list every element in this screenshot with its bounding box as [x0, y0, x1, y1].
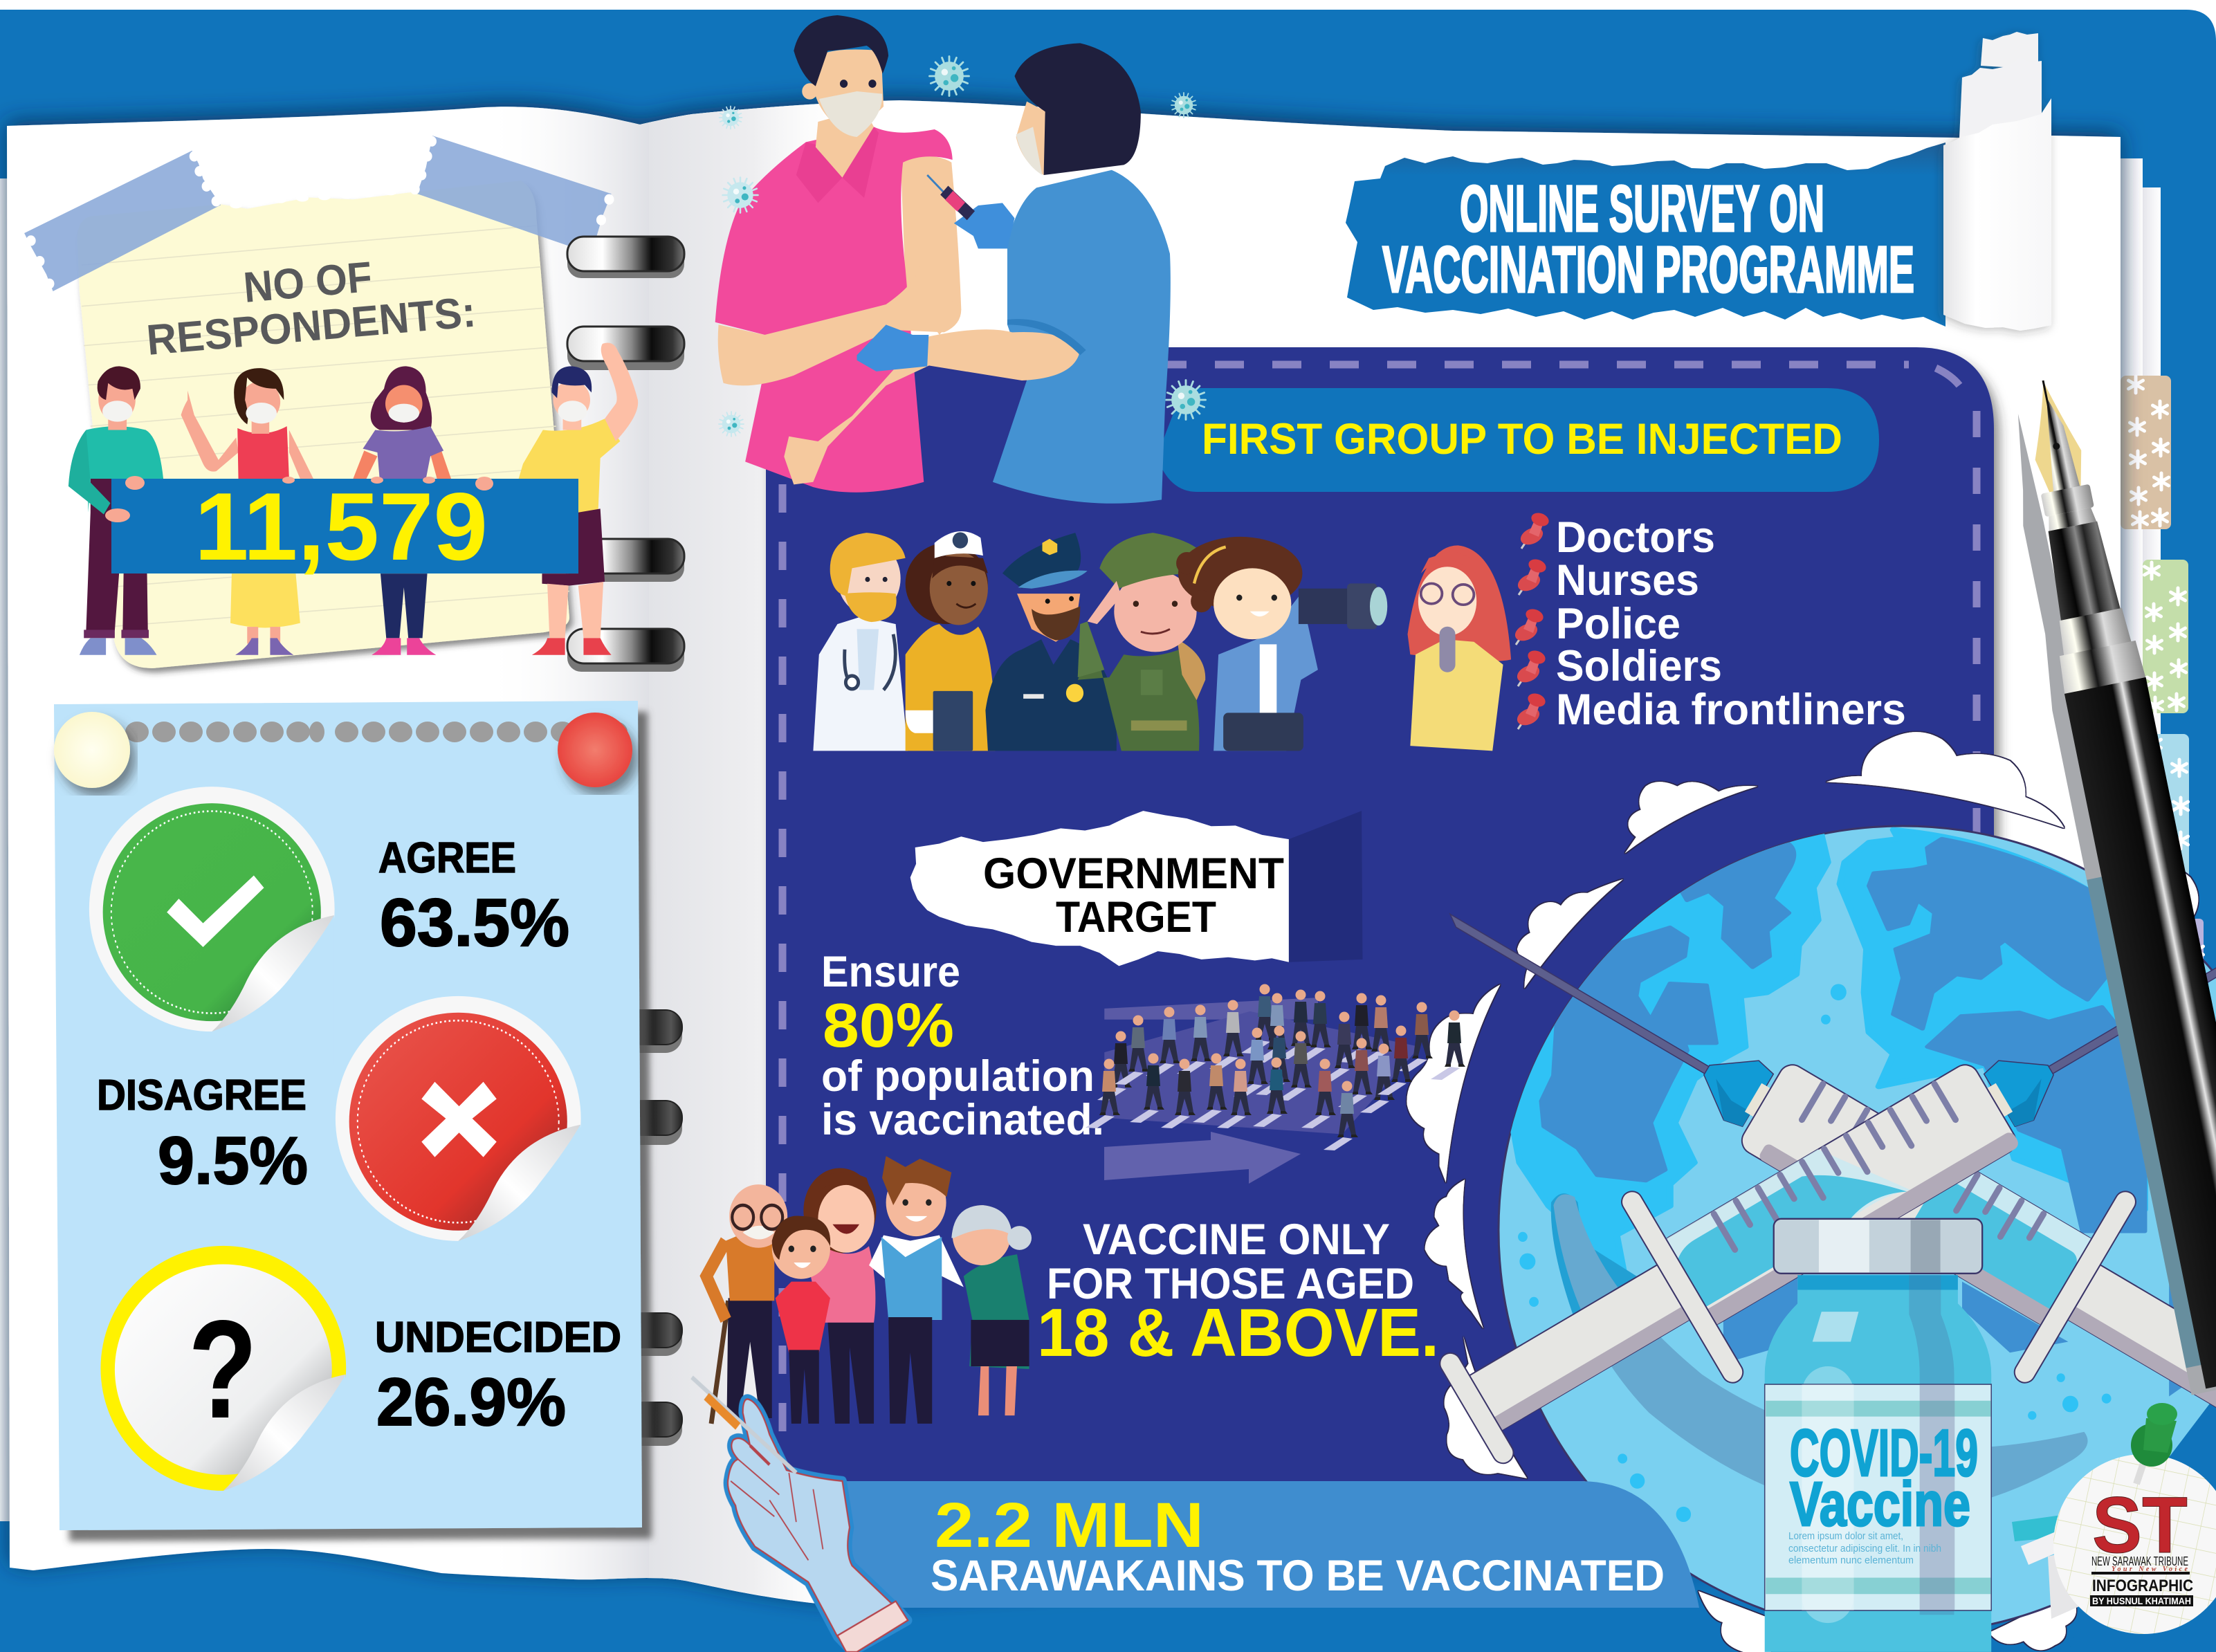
father — [869, 1156, 964, 1424]
survey results note — [54, 701, 642, 1530]
result: undecided — [375, 1314, 621, 1440]
person: red dress — [181, 368, 313, 655]
icon: green pin — [2131, 1403, 2177, 1484]
police — [985, 533, 1117, 751]
credit: BY HUSNUL KHATIMAH — [2092, 1595, 2191, 1606]
frontliners illustration — [813, 531, 1387, 751]
corner blue beyond globe — [2069, 1395, 2216, 1652]
virus particles — [719, 57, 1196, 437]
boy — [772, 1216, 830, 1424]
pushpins — [1512, 511, 1550, 729]
photographer — [1176, 537, 1387, 751]
globe land: blue south-east — [1927, 1007, 2145, 1231]
grandfather — [706, 1184, 787, 1424]
respondent people — [68, 343, 638, 655]
vaccine age text: 18 & ABOVE. — [1037, 1294, 1439, 1370]
notebook left under-page — [0, 178, 31, 1521]
target statistic text: of population — [821, 1052, 1095, 1101]
target statistic text: is vaccinated. — [821, 1096, 1104, 1144]
label text: GOVERNMENT — [983, 850, 1284, 898]
doctor — [813, 533, 908, 751]
vaccination scene — [715, 15, 1171, 504]
binding holes — [125, 722, 628, 742]
logo mark: ST — [2092, 1481, 2188, 1570]
mother — [803, 1168, 877, 1424]
result: undecided: UNDECIDED — [375, 1314, 621, 1361]
sticker: disagree — [336, 996, 581, 1275]
vaccine vial: consectetur adipiscing elit. In in nibh — [1788, 1543, 1941, 1554]
globe — [1499, 826, 2216, 1634]
note heading: NO OF — [241, 253, 374, 312]
pen shadow — [1993, 413, 2216, 1395]
frontline journalist — [1408, 545, 1511, 751]
spine shading — [509, 104, 819, 1604]
government target torn label: TARGET — [1056, 893, 1216, 942]
target statistic text: Ensure — [821, 948, 960, 996]
first group heading pill — [1157, 388, 1879, 492]
blue band with count — [105, 473, 578, 580]
vaccine age text — [1037, 1215, 1439, 1370]
title text line 1: ONLINE SURVEY ON — [1460, 172, 1824, 246]
syringe: upper-right needle — [1412, 823, 2216, 1507]
crowd walking — [1086, 984, 1465, 1184]
tab: beige — [2121, 376, 2171, 529]
question mark: ? — [188, 1291, 257, 1447]
paper curl — [1943, 32, 2051, 331]
tape: left — [24, 151, 221, 291]
list: first group: Doctors — [1556, 513, 1715, 562]
target statistic text: 80% — [823, 991, 954, 1061]
vaccine vial — [1765, 1219, 1991, 1652]
list: first group: Soldiers — [1556, 642, 1722, 690]
icon: cream pin — [54, 712, 130, 788]
globe land: bright east — [1840, 829, 2145, 1210]
result: agree — [378, 834, 569, 960]
vaccine vial: Lorem ipsum dolor sit amet, — [1788, 1530, 1903, 1542]
list: first group: Police — [1556, 600, 1681, 648]
sticker: undecided — [100, 1246, 346, 1525]
list: first group: Media frontliners — [1556, 686, 1906, 734]
nurse with syringe — [857, 43, 1171, 504]
syringe: upper-left needle — [1393, 823, 2216, 1503]
result: disagree: DISAGREE — [97, 1072, 306, 1119]
result: disagree — [97, 1072, 308, 1198]
icon: virus above pill — [1166, 380, 1205, 419]
notebook page stack on right — [2006, 158, 2161, 1087]
tab: blue — [2143, 734, 2189, 900]
vaccine age text: VACCINE ONLY — [1083, 1215, 1390, 1264]
icon: gloved hand with syringe — [692, 1377, 908, 1652]
title: torn blue band — [1346, 143, 1945, 327]
bottom banner — [847, 1481, 1699, 1608]
result: disagree: 9.5% — [158, 1123, 308, 1198]
respondents note: RESPONDENTS: — [145, 288, 477, 365]
result: agree: AGREE — [378, 834, 516, 882]
notebook rings upper — [567, 237, 684, 672]
person: teal — [68, 366, 163, 655]
result: agree: 63.5% — [380, 885, 569, 960]
globe land: blue west — [1541, 928, 1716, 1181]
clouds around globe — [1407, 732, 2198, 1652]
tab: purple — [2159, 919, 2204, 1016]
infographic label: INFOGRAPHIC — [2092, 1577, 2193, 1595]
tape: right — [417, 136, 612, 254]
list: first group: Nurses — [1556, 556, 1699, 605]
result: undecided: 26.9% — [376, 1364, 566, 1440]
number of respondents: 11,579 — [194, 473, 488, 580]
banner text: SARAWAKAINS TO BE VACCINATED — [931, 1552, 1665, 1600]
target statistic text — [821, 948, 1104, 1144]
vaccine vial: elementum nunc elementum — [1788, 1554, 1914, 1566]
family illustration — [706, 1156, 1032, 1424]
tagline: Your New Voice — [2112, 1566, 2188, 1573]
list: first group — [1556, 513, 1906, 734]
vaccine age text: FOR THOSE AGED — [1047, 1260, 1414, 1308]
globe land: bright west — [1510, 834, 1831, 1270]
soldier — [1078, 533, 1205, 751]
heading text: FIRST GROUP TO BE INJECTED — [1202, 415, 1842, 464]
person: purple shirt — [353, 366, 451, 655]
vial label text: COVID-19 — [1790, 1416, 1978, 1490]
fountain pen — [1988, 372, 2216, 1395]
person: yellow shirt — [519, 343, 638, 655]
nurse — [906, 531, 995, 751]
tape on sticker — [2012, 1515, 2088, 1619]
icon: red pin — [558, 713, 632, 787]
lower rings — [609, 1010, 682, 1446]
scalloped torn edges — [26, 136, 614, 289]
respondents note — [24, 136, 614, 668]
government target torn label — [910, 811, 1362, 966]
2.2 MLN: 2.2 MLN — [935, 1490, 1204, 1561]
globe land: blue north-west — [1680, 843, 1794, 967]
globe land: blue north-east — [1869, 838, 2116, 1029]
vaccine vial: Vaccine — [1790, 1470, 1970, 1539]
sticker: agree — [89, 787, 335, 1065]
logo: New Sarawak Tribune — [2012, 1403, 2216, 1634]
arrow — [1104, 1132, 1301, 1184]
tab: green — [2143, 560, 2188, 714]
panel dashed stitching — [782, 365, 1977, 1435]
patient — [715, 15, 961, 493]
dark panel — [766, 347, 1994, 1550]
grandmother — [951, 1205, 1032, 1415]
